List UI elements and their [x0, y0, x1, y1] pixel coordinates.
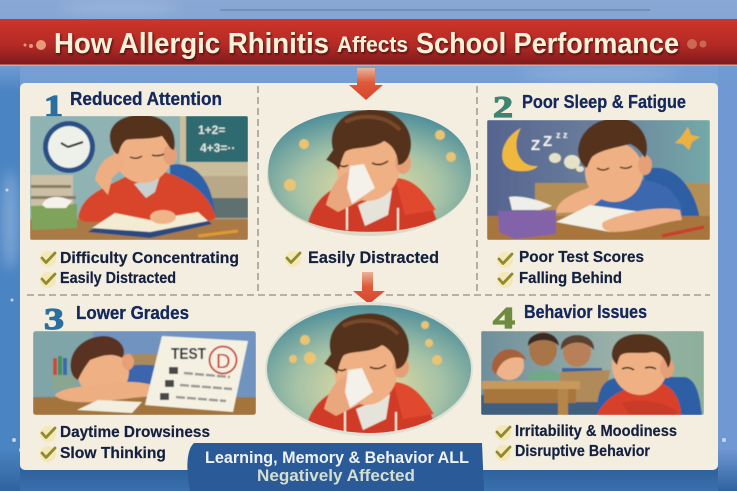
bullet list: Difficulty Concentrating [60, 250, 239, 267]
illustration: boy reading at desk: 4+3=·· [200, 141, 235, 155]
moon [502, 128, 538, 171]
bullet list [40, 424, 210, 462]
test paper [145, 336, 248, 412]
bullet list [40, 250, 239, 288]
illustration: boy asleep at desk [487, 118, 710, 240]
illustration: boy reading at desk [30, 115, 248, 240]
bullet list: Irritability & Moodiness [515, 423, 677, 440]
summary text: Negatively Affected [257, 466, 415, 485]
panel 2: poor sleep and fatigue [487, 89, 710, 288]
bullet list: Falling Behind [519, 270, 622, 287]
illustration: classmates and upset boy [481, 331, 704, 415]
illustration: boy asleep at desk: z z [556, 130, 568, 140]
heading: Behavior Issues [524, 302, 647, 322]
heading: Lower Grades [76, 303, 189, 323]
title [54, 28, 679, 60]
bullet list: Easily Distracted [60, 270, 176, 287]
number 1: 1 [44, 88, 63, 123]
bullet list: Disruptive Behavior [515, 443, 650, 460]
bullet list [495, 423, 677, 461]
summary text: Learning, Memory & Behavior ALL [205, 448, 469, 467]
panel 4: behavior issues [481, 300, 704, 461]
panel 1: reduced attention [30, 88, 248, 288]
center list item: Easily Distracted [308, 248, 439, 267]
number 2: 2 [493, 89, 513, 124]
illustration: boy asleep with failed test [33, 331, 256, 415]
arrow: top [349, 68, 383, 100]
bullet list: Poor Test Scores [519, 249, 644, 266]
paper card [20, 83, 718, 470]
title: Affects [337, 32, 408, 57]
classmates [492, 332, 602, 380]
panel 3: lower grades [33, 301, 256, 462]
illustration: boy asleep at desk: Z [543, 133, 552, 150]
number 3: 3 [44, 301, 64, 336]
clock [43, 121, 95, 173]
number 4: 4 [493, 300, 515, 335]
bullet list [497, 249, 644, 288]
heading: Reduced Attention [70, 89, 222, 109]
title banner [0, 19, 737, 66]
decorative dots: right [687, 39, 706, 49]
summary text [205, 448, 469, 485]
illustration: boy asleep at desk: Z [531, 137, 540, 154]
bullet list: Slow Thinking [60, 445, 166, 462]
title: How Allergic Rhinitis [54, 28, 329, 60]
heading: Poor Sleep & Fatigue [522, 92, 686, 112]
arrow: middle [353, 272, 385, 304]
bullet list: Daytime Drowsiness [60, 424, 210, 441]
bottom banner [187, 443, 484, 491]
center illustration: boy with tissue, top [267, 109, 472, 236]
center illustration: boy with tissue, bottom [265, 302, 473, 436]
tissue box [498, 197, 556, 239]
illustration: boy reading at desk: 1+2= [198, 123, 225, 137]
title: School Performance [416, 28, 679, 60]
test paper: D [216, 351, 230, 373]
test paper: TEST [171, 346, 206, 363]
decorative dots: left [24, 40, 46, 50]
tissue box [31, 197, 77, 230]
